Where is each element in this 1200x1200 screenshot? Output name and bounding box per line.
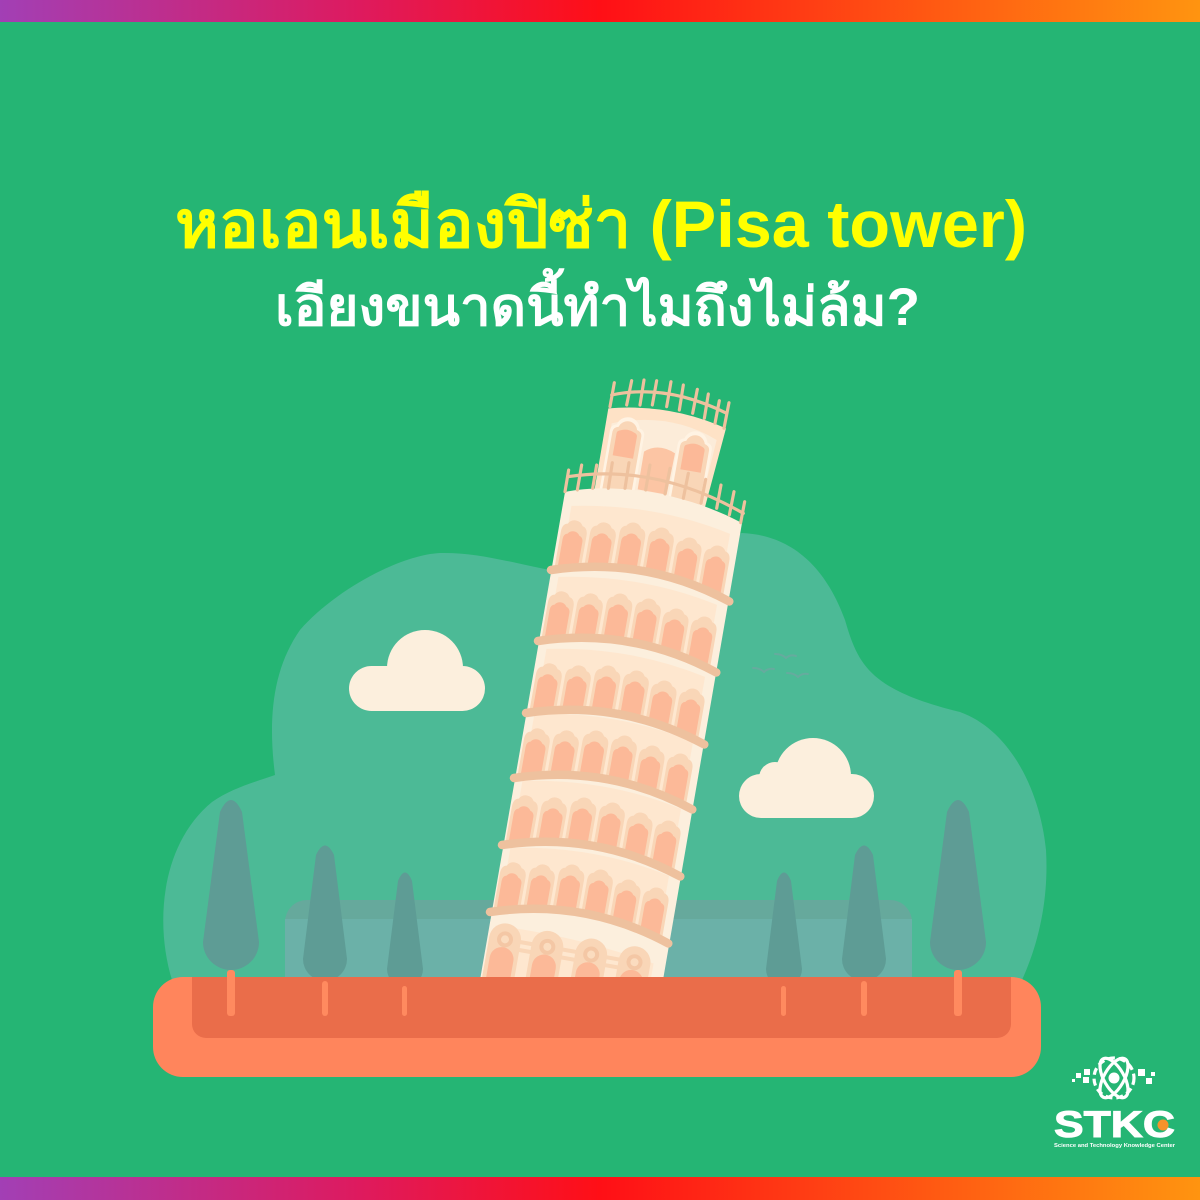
ground story with large arches	[480, 921, 656, 1021]
story 6	[490, 839, 674, 957]
birds	[753, 654, 808, 677]
story 3	[526, 640, 710, 758]
story 5	[502, 772, 686, 890]
ring 1	[551, 555, 732, 601]
tree 3	[387, 872, 423, 987]
title line 2: เอียงขนาดนี้ทำไมถึงไม่ล้ม?	[275, 268, 920, 337]
logo pixel squares	[1072, 1069, 1155, 1084]
title line 1: หอเอนเมืองปิซ่า (Pisa tower)	[175, 187, 1027, 261]
logo: STKC	[1054, 1054, 1176, 1149]
logo tagline: Science and Technology Knowledge Center	[1054, 1143, 1176, 1149]
ground platform	[153, 977, 1041, 1077]
tree 4	[766, 872, 802, 987]
tree trunks	[227, 970, 962, 1016]
pond	[285, 900, 912, 990]
top railing	[610, 380, 729, 428]
bottom gradient bar	[0, 1177, 1200, 1200]
ring 6	[490, 897, 671, 943]
ring 2	[538, 626, 719, 672]
cloud left	[349, 630, 485, 711]
logo orange dot	[1158, 1120, 1168, 1130]
story 2	[538, 568, 722, 686]
tree 1	[203, 800, 259, 970]
logo atom icon	[1094, 1054, 1134, 1102]
cloud right	[739, 738, 874, 818]
story 1	[551, 497, 735, 615]
leaning tower	[480, 380, 745, 1021]
tree 2	[303, 846, 347, 981]
tower body	[480, 488, 742, 980]
main railing	[565, 463, 745, 523]
tree 6	[930, 800, 986, 970]
story 4	[514, 705, 698, 823]
ring 5	[502, 830, 683, 876]
ring 4	[514, 763, 695, 809]
top gradient bar	[0, 0, 1200, 22]
logo wordmark: STKC	[1054, 1104, 1175, 1145]
belfry	[593, 407, 726, 513]
background hill blob	[163, 533, 1046, 980]
ring 3	[526, 698, 707, 744]
tree 5	[842, 846, 886, 981]
